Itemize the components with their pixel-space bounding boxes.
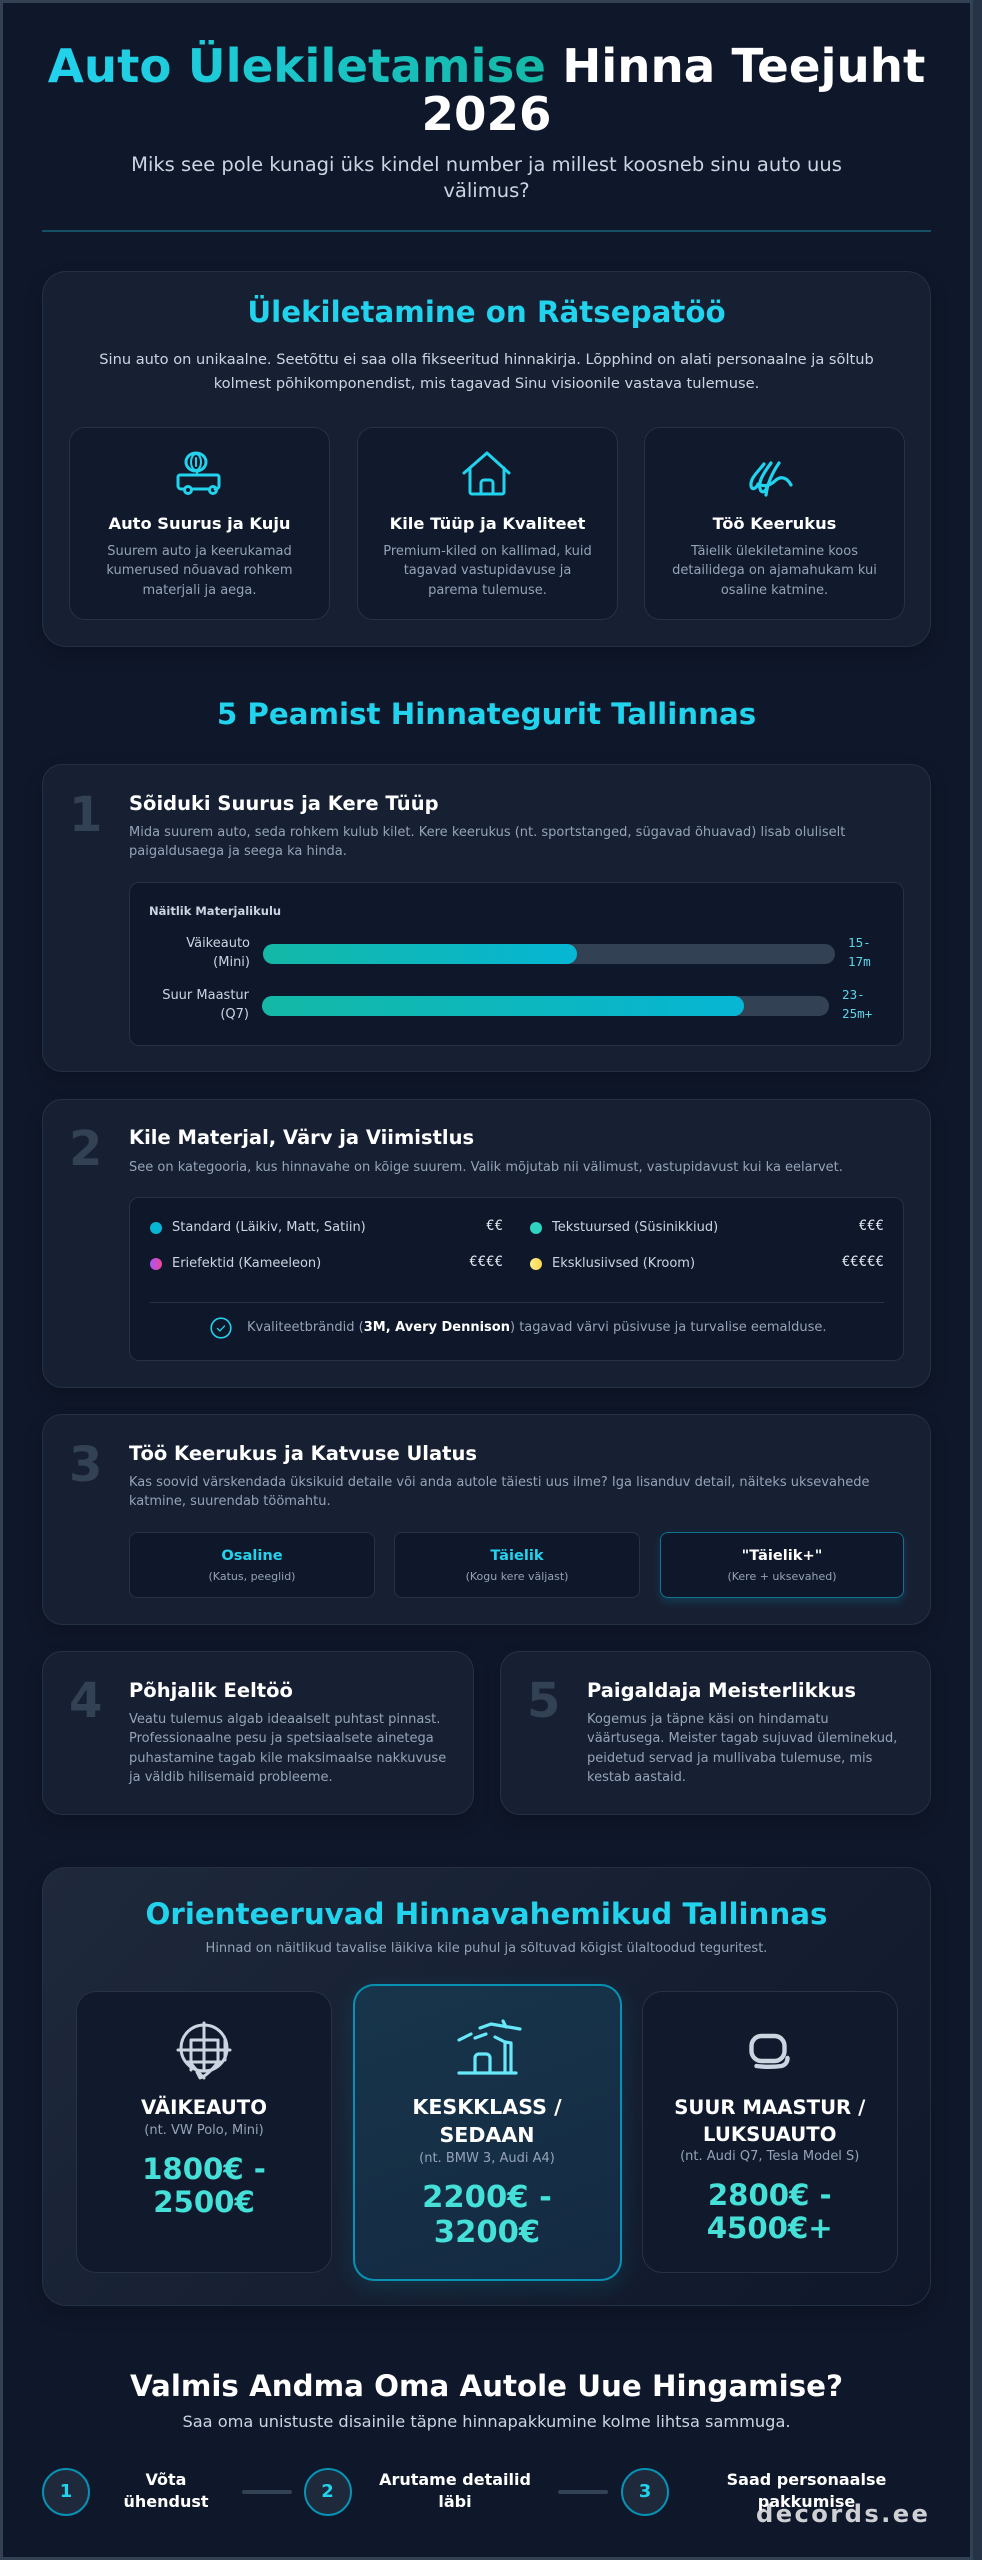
subtitle (131, 153, 842, 202)
header (42, 40, 931, 232)
factor title: Töö Keerukus ja Katvuse Ulatus (129, 1442, 477, 1465)
option: partial (129, 1532, 375, 1598)
factor description (128, 1712, 446, 1785)
step 1 label: ühendust (123, 2492, 209, 2511)
value: small car: 17m (848, 954, 871, 969)
card description: detailidega on ajamahukam kui (672, 563, 877, 578)
step 2 label (379, 2470, 531, 2511)
price card: mid-class (highlighted) (352, 1984, 622, 2281)
tier examples: (nt. VW Polo, Mini) (144, 2123, 264, 2138)
value: large SUV: 25m+ (842, 1006, 872, 1021)
factor description: ja väldib hilisemaid probleeme. (129, 1770, 333, 1785)
panel: factor 3 complexity and coverage (42, 1414, 931, 1625)
card description: tagavad vastupidavuse ja (404, 563, 571, 578)
factor description: väärtusega. Meister tagab sujuvad üleminekud, (587, 1731, 897, 1746)
step 1 label (123, 2470, 209, 2511)
tier price: 4500€+ (707, 2210, 833, 2244)
factor description (129, 825, 846, 859)
tier price: 2200€ - (422, 2180, 552, 2215)
heading: Valmis Andma Oma Autole Uue Hingamise? (130, 2369, 843, 2403)
number: 1 (69, 787, 102, 843)
step 1 circle (42, 2468, 90, 2516)
panel: tailoring intro (42, 271, 931, 647)
call to action (130, 2369, 843, 2431)
factor description: Veatu tulemus algab ideaalselt puhtast pinnast. (129, 1712, 440, 1727)
step 2 label: Arutame detailid (379, 2470, 531, 2489)
factor description (129, 1475, 869, 1509)
tier examples: (nt. BMW 3, Audi A4) (419, 2151, 555, 2166)
price: special effects: €€€€ (469, 1254, 503, 1270)
option: full (394, 1532, 640, 1598)
bar chart: material use (129, 882, 904, 1046)
card: film type (357, 427, 618, 620)
price: textured: €€€ (859, 1218, 884, 1234)
price card: small car (76, 1991, 332, 2273)
title: Auto Ülekiletamise Hinna Teejuht (48, 40, 925, 94)
icon: check circle (210, 1317, 232, 1339)
option label: "Täielik+" (742, 1547, 822, 1564)
tier title: SUUR MAASTUR / (674, 2096, 865, 2119)
row label: large SUV: (Q7) (220, 1007, 249, 1022)
title (48, 40, 925, 142)
tier price: 2500€ (153, 2184, 255, 2218)
value: large SUV: 23- (842, 987, 865, 1002)
tier price: 1800€ - (142, 2152, 266, 2186)
subtitle: Miks see pole kunagi üks kindel number ja millest koosneb sinu auto uus (131, 153, 842, 176)
tier price (707, 2178, 833, 2244)
option detail: (Kogu kere väljast) (466, 1570, 568, 1583)
card description: parema tulemuse. (428, 583, 547, 598)
subheading: Hinnad on näitlikud tavalise läikiva kile puhul ja sõltuvad kõigist ülaltoodud teguritest. (206, 1941, 767, 1956)
panel: factor 1 vehicle size (42, 764, 931, 1072)
value: large SUV (842, 987, 872, 1021)
section heading: price factors: 5 Peamist Hinnategurit Tallinnas (217, 697, 756, 731)
step 2 circle (304, 2468, 352, 2516)
number: 2 (69, 1121, 102, 1177)
material price list (129, 1197, 904, 1361)
dot: special effects (150, 1258, 162, 1270)
factor description: paigaldusaega ja seega ka hinda. (129, 844, 347, 859)
card description: materjali ja aega. (142, 583, 257, 598)
row label: small car: Väikeauto (186, 936, 250, 951)
step 3 circle: 3 (639, 2481, 651, 2502)
card description: Suurem auto ja keerukamad (107, 544, 292, 559)
watermark: decords.ee (756, 2500, 930, 2528)
step 3 label (727, 2470, 886, 2511)
heading: Orienteeruvad Hinnavahemikud Tallinnas (146, 1897, 827, 1931)
factor description: Kas soovid värskendada üksikuid detaile või anda autole täiesti uus ilme? Iga lisanduv detail, näiteks uksevahede (129, 1475, 869, 1490)
tier price (142, 2152, 266, 2218)
factor description: katmine, suurendab töömahtu. (129, 1494, 331, 1509)
title: 2026 (422, 88, 551, 142)
intro text (99, 351, 874, 392)
card description (672, 544, 877, 598)
row label: large SUV (162, 988, 249, 1022)
tier examples: (nt. Audi Q7, Tesla Model S) (680, 2149, 859, 2164)
step 2 circle: 2 (321, 2481, 334, 2502)
step 2 label: läbi (438, 2492, 472, 2511)
option: full plus (660, 1532, 904, 1598)
price: exclusive: €€€€€ (842, 1254, 884, 1270)
factor description: puhastamine tagab kile maksimaalse nakkuvuse (129, 1751, 446, 1766)
tier price (422, 2180, 552, 2250)
factor title: Sõiduki Suurus ja Kere Tüüp (129, 792, 439, 815)
factor description: kestab aastaid. (587, 1770, 686, 1785)
panel: factor 2 film material (42, 1099, 931, 1388)
panel: price ranges (42, 1867, 931, 2306)
number: 4 (69, 1673, 102, 1729)
label: special effects: Eriefektid (Kameeleon) (172, 1256, 321, 1271)
tier title: VÄIKEAUTO (141, 2096, 267, 2119)
card description (106, 544, 293, 598)
label: exclusive: Eksklusiivsed (Kroom) (552, 1256, 695, 1271)
card description: Premium-kiled on kallimad, kuid (383, 544, 592, 559)
factor description: peidetud servad ja mullivaba tulemuse, mis (587, 1751, 872, 1766)
step 1 circle: 1 (60, 2481, 72, 2502)
tier title: LUKSUAUTO (703, 2123, 836, 2146)
quality brands note: Kvaliteetbrändid (3M, Avery Dennison) tagavad värvi püsivuse ja turvalise eemalduse. (247, 1320, 826, 1335)
tier title: KESKKLASS / (412, 2095, 562, 2119)
subheading: Saa oma unistuste disainile täpne hinnapakkumine kolme lihtsa sammuga. (182, 2412, 791, 2431)
bar: small car (263, 944, 835, 964)
option detail: (Kere + uksevahed) (727, 1570, 837, 1583)
row label: small car (186, 936, 250, 970)
heading: Ülekiletamine on Rätsepatöö (247, 295, 726, 329)
icon: swirl strokes (749, 461, 793, 497)
step 1 label: Võta (146, 2470, 186, 2489)
icon: car and wheel (176, 452, 220, 495)
factor description: Mida suurem auto, seda rohkem kulub kilet. Kere keerukus (nt. sportstanged, sügavad õhuavad) lisab oluliselt (129, 825, 845, 840)
row label: small car: (Mini) (213, 955, 250, 970)
value: small car (848, 935, 871, 969)
label: textured: Tekstuursed (Süsinikkiud) (552, 1220, 718, 1235)
card: car size (69, 427, 330, 620)
icon: rounded stack (749, 2034, 790, 2069)
icon: building and strokes (457, 2019, 522, 2075)
bar: large SUV (262, 996, 829, 1016)
intro text: kolmest põhikomponendist, mis tagavad Sinu visioonile vastava tulemuse. (214, 375, 759, 392)
tier title: SEDAAN (439, 2123, 535, 2147)
card description: Täielik ülekiletamine koos (691, 544, 858, 559)
number: 5 (527, 1673, 560, 1729)
icon: house (462, 451, 511, 496)
card description (383, 544, 592, 598)
dot: textured (530, 1222, 542, 1234)
label: standard: Standard (Läikiv, Matt, Satiin) (172, 1220, 366, 1235)
subtitle: välimus? (443, 179, 530, 202)
tier price: 2800€ - (708, 2178, 832, 2212)
dot: standard (150, 1222, 162, 1234)
card title: Auto Suurus ja Kuju (108, 514, 291, 532)
tier price: 3200€ (434, 2215, 540, 2250)
card description: osaline katmine. (721, 583, 828, 598)
factor title: Kile Materjal, Värv ja Viimistlus (129, 1126, 474, 1149)
value: small car: 15- (848, 935, 871, 950)
factor title: Paigaldaja Meisterlikkus (587, 1679, 856, 1702)
price card: large SUV (642, 1991, 898, 2273)
factor description: Professionaalne pesu ja spetsiaalsete ainetega (129, 1731, 434, 1746)
chart title: Näitlik Materjalikulu (149, 904, 281, 918)
factor description (587, 1712, 897, 1785)
option label: Osaline (221, 1547, 283, 1564)
card: work complexity (644, 427, 905, 620)
option label: Täielik (490, 1547, 544, 1564)
tier title (674, 2096, 866, 2146)
tier title (412, 2095, 562, 2147)
card title: Kile Tüüp ja Kvaliteet (390, 514, 585, 532)
factor description: Kogemus ja täpne käsi on hindamatu (587, 1712, 829, 1727)
step 3 label: pakkumise (758, 2492, 855, 2511)
number: 3 (69, 1437, 102, 1493)
card description: kumerused nõuavad rohkem (106, 563, 293, 578)
panel: factor 4 preparation (42, 1651, 474, 1815)
factor title: Põhjalik Eeltöö (129, 1679, 293, 1702)
factor description: See on kategooria, kus hinnavahe on kõige suurem. Valik mõjutab nii välimust, vastupidavust kui ka eelarvet. (129, 1160, 843, 1175)
step 3 label: Saad personaalse (727, 2470, 886, 2489)
panel: factor 5 installer skill (500, 1651, 931, 1815)
intro text: Sinu auto on unikaalne. Seetõttu ei saa olla fikseeritud hinnakirja. Lõpphind on alati personaalne ja sõltub (99, 351, 874, 368)
price: standard: €€ (486, 1218, 503, 1234)
card title: Töö Keerukus (713, 514, 836, 532)
icon: crosshair globe (176, 2022, 232, 2080)
row label: large SUV: Suur Maastur (162, 988, 249, 1003)
option detail: (Katus, peeglid) (209, 1570, 295, 1583)
dot: exclusive (530, 1258, 542, 1270)
step 3 circle (621, 2468, 669, 2516)
